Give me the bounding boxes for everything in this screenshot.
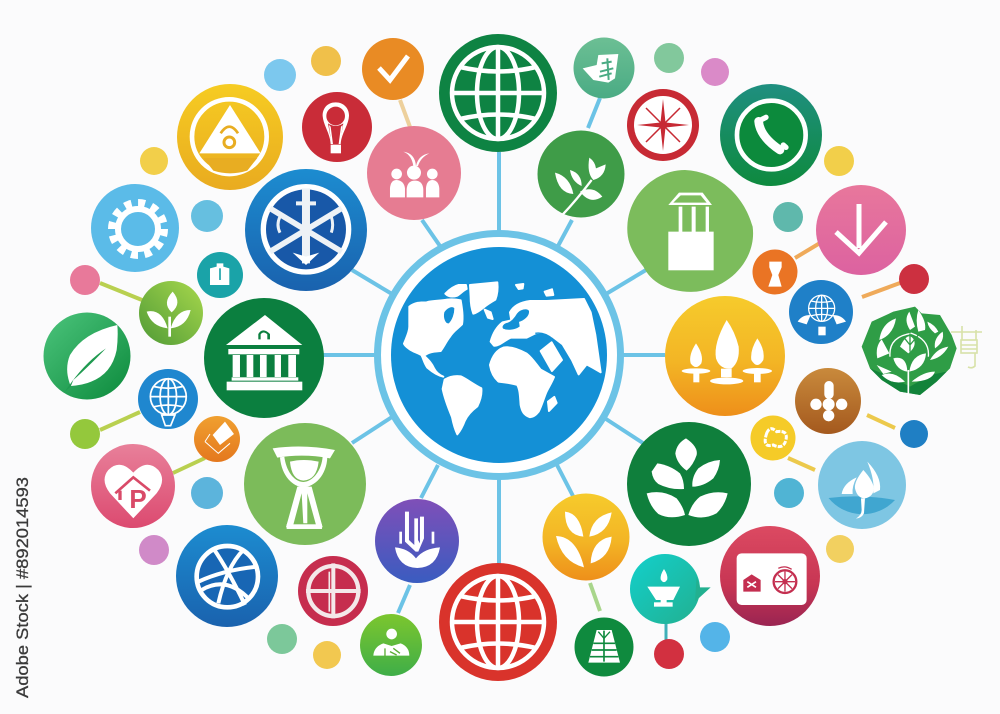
icon: people group <box>367 126 461 220</box>
north america <box>404 299 463 377</box>
icon: gear <box>91 184 179 272</box>
icon: three flames <box>665 296 785 416</box>
eurasia <box>491 299 601 374</box>
icon: leaf <box>44 312 130 400</box>
icon: small teal badge <box>197 252 243 298</box>
icon: green globe <box>439 34 557 152</box>
icon: warning triangle badge <box>177 84 283 190</box>
icon: teal cup speech bubble <box>630 554 711 624</box>
icon: small orange vase <box>752 250 798 294</box>
icon: red compass <box>627 89 699 161</box>
icon: pink arrow <box>816 185 906 275</box>
hudson bay <box>444 308 454 323</box>
icon: leaf shield badge <box>574 38 634 98</box>
icon: person at desk <box>360 614 422 676</box>
icon: dark green jacket <box>574 618 634 676</box>
icon: small yellow badge <box>750 416 796 460</box>
baltic and north sea <box>503 310 529 329</box>
icon: temple building blob <box>627 170 753 292</box>
icon: bank building <box>204 298 324 418</box>
icon: sprout <box>139 281 203 345</box>
icon: yellow plant <box>542 494 630 580</box>
icon: red globe <box>439 563 557 681</box>
icon: phone <box>720 84 822 186</box>
image id text: Adobe Stock | #892014593 <box>13 477 32 698</box>
africa <box>490 347 554 417</box>
icon: check mark <box>362 38 424 100</box>
icon: small line-art lantern <box>951 326 982 368</box>
connector spokes <box>100 98 900 640</box>
icon: blue wheel with arrows <box>245 169 367 291</box>
icon: brown clover <box>795 368 861 434</box>
icon: large green leaf emblem <box>862 307 957 396</box>
madagascar <box>548 397 557 411</box>
black sea line <box>535 333 560 349</box>
icon: light bulb <box>302 92 372 162</box>
icon: orange tool <box>194 416 240 462</box>
icon: heart with house and P <box>91 444 175 528</box>
icon: dark green leaves <box>627 422 751 546</box>
icon: water drop <box>818 441 906 529</box>
icon: plant sprig <box>538 130 624 218</box>
icon: purple plant <box>375 499 459 583</box>
arabia <box>541 342 562 371</box>
icon: blue wheel bottom <box>176 525 278 627</box>
icon: trophy cup <box>244 423 366 545</box>
icon: crimson target <box>298 556 368 626</box>
icon: heart with house and P: P <box>129 484 147 514</box>
icon: crimson card <box>720 526 820 626</box>
islands <box>516 284 553 296</box>
icon: blue globe with wings <box>789 280 853 344</box>
south america <box>443 376 481 434</box>
greenland <box>470 282 498 314</box>
arctic islands <box>445 285 467 296</box>
central globe <box>378 234 620 476</box>
icon: balloon globe <box>138 369 198 429</box>
small coloured dots <box>70 43 929 669</box>
